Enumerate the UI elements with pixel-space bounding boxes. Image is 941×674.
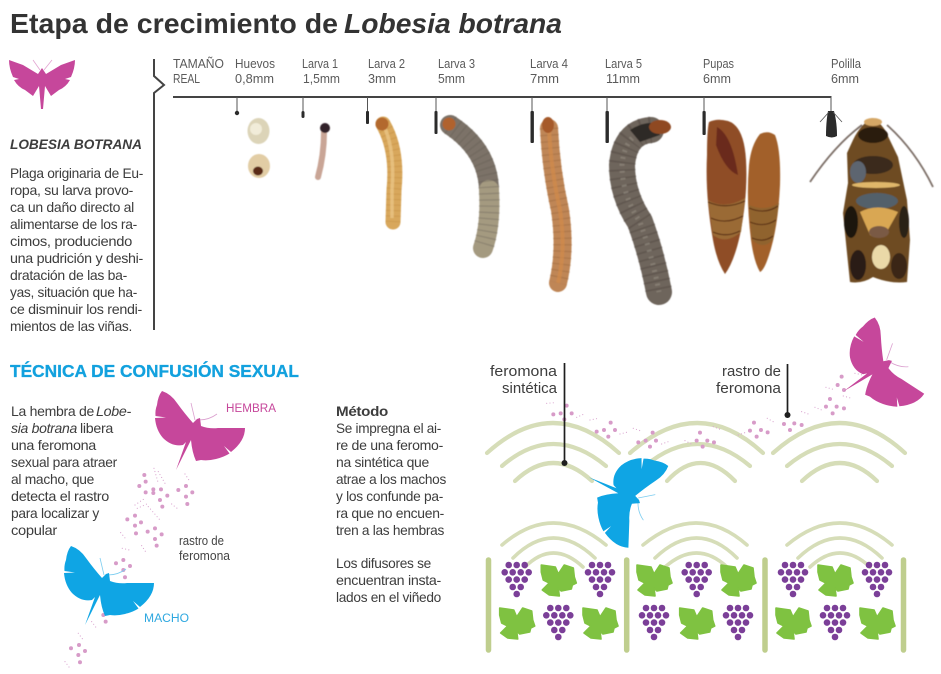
size scale labels: 11mm	[606, 72, 640, 86]
title: Etapa de crecimiento de	[10, 8, 338, 39]
text block: description: ca un daño directo al	[10, 199, 134, 215]
photo: larva 3	[442, 118, 489, 248]
label: hembra: HEMBRA	[226, 403, 276, 415]
size scale labels: REAL	[173, 72, 200, 86]
text block: female and male explanation: detecta el rastro	[11, 488, 110, 504]
text block: método: na sintética que	[336, 454, 429, 470]
size scale labels: 7mm	[530, 72, 559, 86]
text block: description: una pudrición y deshi-	[10, 250, 144, 266]
callout: feromona sintética: sintética	[502, 381, 558, 397]
grapes and leaves, first row	[501, 562, 892, 597]
photo: larva 4	[542, 117, 563, 283]
moth: pink female flying	[826, 314, 941, 429]
callout: rastro de feromona: rastro de	[722, 364, 781, 380]
text block: método: encuentran insta-	[336, 572, 442, 588]
text block: método: re de una feromo-	[336, 437, 444, 453]
size scale labels: 6mm	[703, 72, 731, 86]
icon: pink moth	[9, 60, 75, 109]
upper pheromone arcs	[487, 423, 905, 481]
size scale labels: Larva 1	[302, 57, 338, 71]
size scale labels: Huevos	[235, 57, 275, 71]
heading: técnica de confusión sexual: TÉCNICA DE CONFUSIÓN SEXUAL	[10, 360, 299, 381]
text block: description: ce disminuir los rendi-	[10, 301, 143, 317]
label: macho: MACHO	[144, 613, 189, 625]
photo: eggs	[248, 118, 270, 178]
photo: adult moth	[810, 118, 933, 282]
callout: feromona sintética: feromona	[490, 364, 558, 380]
text block: description: mientos de las viñas.	[10, 318, 132, 334]
size scale labels	[173, 57, 861, 86]
text block: método: tren a las hembras	[336, 522, 444, 538]
moth: female (hembra)	[155, 391, 245, 470]
photo: larva 5	[622, 120, 671, 292]
size scale labels: 5mm	[438, 72, 465, 86]
text block: female and male explanation	[11, 403, 132, 538]
lower pheromone arcs	[502, 523, 892, 567]
size scale labels: 1,5mm	[303, 72, 340, 86]
text block: método: atrae a los machos	[336, 471, 446, 487]
text block: female and male explanation: Lobe-	[96, 403, 132, 419]
text block: description: dratación de las ba-	[10, 267, 128, 283]
panel: vineyard diagram	[487, 373, 905, 650]
size scale labels: Polilla	[831, 57, 861, 71]
bracket divider	[154, 59, 164, 330]
photo: larva 2	[376, 118, 395, 222]
text block: female and male explanation: La hembra de	[11, 403, 95, 419]
size scale labels: 3mm	[368, 72, 396, 86]
text block: método: Los difusores se	[336, 555, 431, 571]
text block: método	[336, 403, 446, 605]
text block: female and male explanation: sia botrana	[11, 420, 78, 436]
callout: rastro de feromona	[716, 364, 790, 418]
label: rastro de feromona	[179, 534, 230, 563]
size scale labels: Larva 3	[438, 57, 475, 71]
text block: método: Método	[336, 403, 388, 419]
label: rastro de feromona: feromona	[179, 549, 230, 563]
moth: male (macho)	[64, 546, 154, 625]
size scale labels: 6mm	[831, 72, 859, 86]
text block: female and male explanation: una feromona	[11, 437, 97, 453]
heading: Lobesia botrana: LOBESIA BOTRANA	[10, 136, 142, 152]
text block: description	[10, 165, 144, 334]
size scale labels: 0,8mm	[235, 72, 274, 86]
text block: description: yas, situación que ha-	[10, 284, 138, 300]
text block: female and male explanation: sexual para atraer	[11, 454, 118, 470]
label: rastro de feromona: rastro de	[179, 534, 224, 548]
text block: description: alimentarse de los ra-	[10, 216, 138, 232]
text block: método: Se impregna el ai-	[336, 420, 442, 436]
text block: método: ra que no encuen-	[336, 505, 445, 521]
text block: método: lados en el viñedo	[336, 589, 441, 605]
text block: female and male explanation: copular	[11, 522, 58, 538]
vineyard posts	[488, 560, 904, 650]
callout: feromona sintética	[490, 363, 568, 466]
text block: female and male explanation: libera	[80, 420, 114, 436]
grapes and leaves, second row	[500, 605, 895, 640]
text block: método: y los confunde pa-	[336, 488, 444, 504]
callout: rastro de feromona: feromona	[716, 381, 782, 397]
size scale axis with real-size ticks	[173, 96, 842, 143]
text block: description: Plaga originaria de Eu-	[10, 165, 144, 181]
size scale labels: Larva 5	[605, 57, 642, 71]
pheromone trail: left diagram	[65, 468, 194, 668]
title: Lobesia botrana	[344, 8, 562, 39]
photo: pupae	[707, 120, 780, 274]
panel: species description	[9, 60, 144, 334]
title	[10, 8, 562, 39]
size scale labels: Pupas	[703, 57, 734, 71]
photo: larva 1	[318, 123, 330, 177]
text block: description: cimos, produciendo	[10, 233, 133, 249]
text block: female and male explanation: para localizar y	[11, 505, 99, 521]
text block: female and male explanation: al macho, que	[11, 471, 95, 487]
size scale labels: Larva 2	[368, 57, 405, 71]
size scale labels: Larva 4	[530, 57, 568, 71]
size scale labels: TAMAÑO	[173, 57, 224, 71]
pheromone trail: vineyard	[547, 373, 863, 449]
text block: description: ropa, su larva provo-	[10, 182, 134, 198]
moth: blue male flying	[586, 456, 669, 549]
